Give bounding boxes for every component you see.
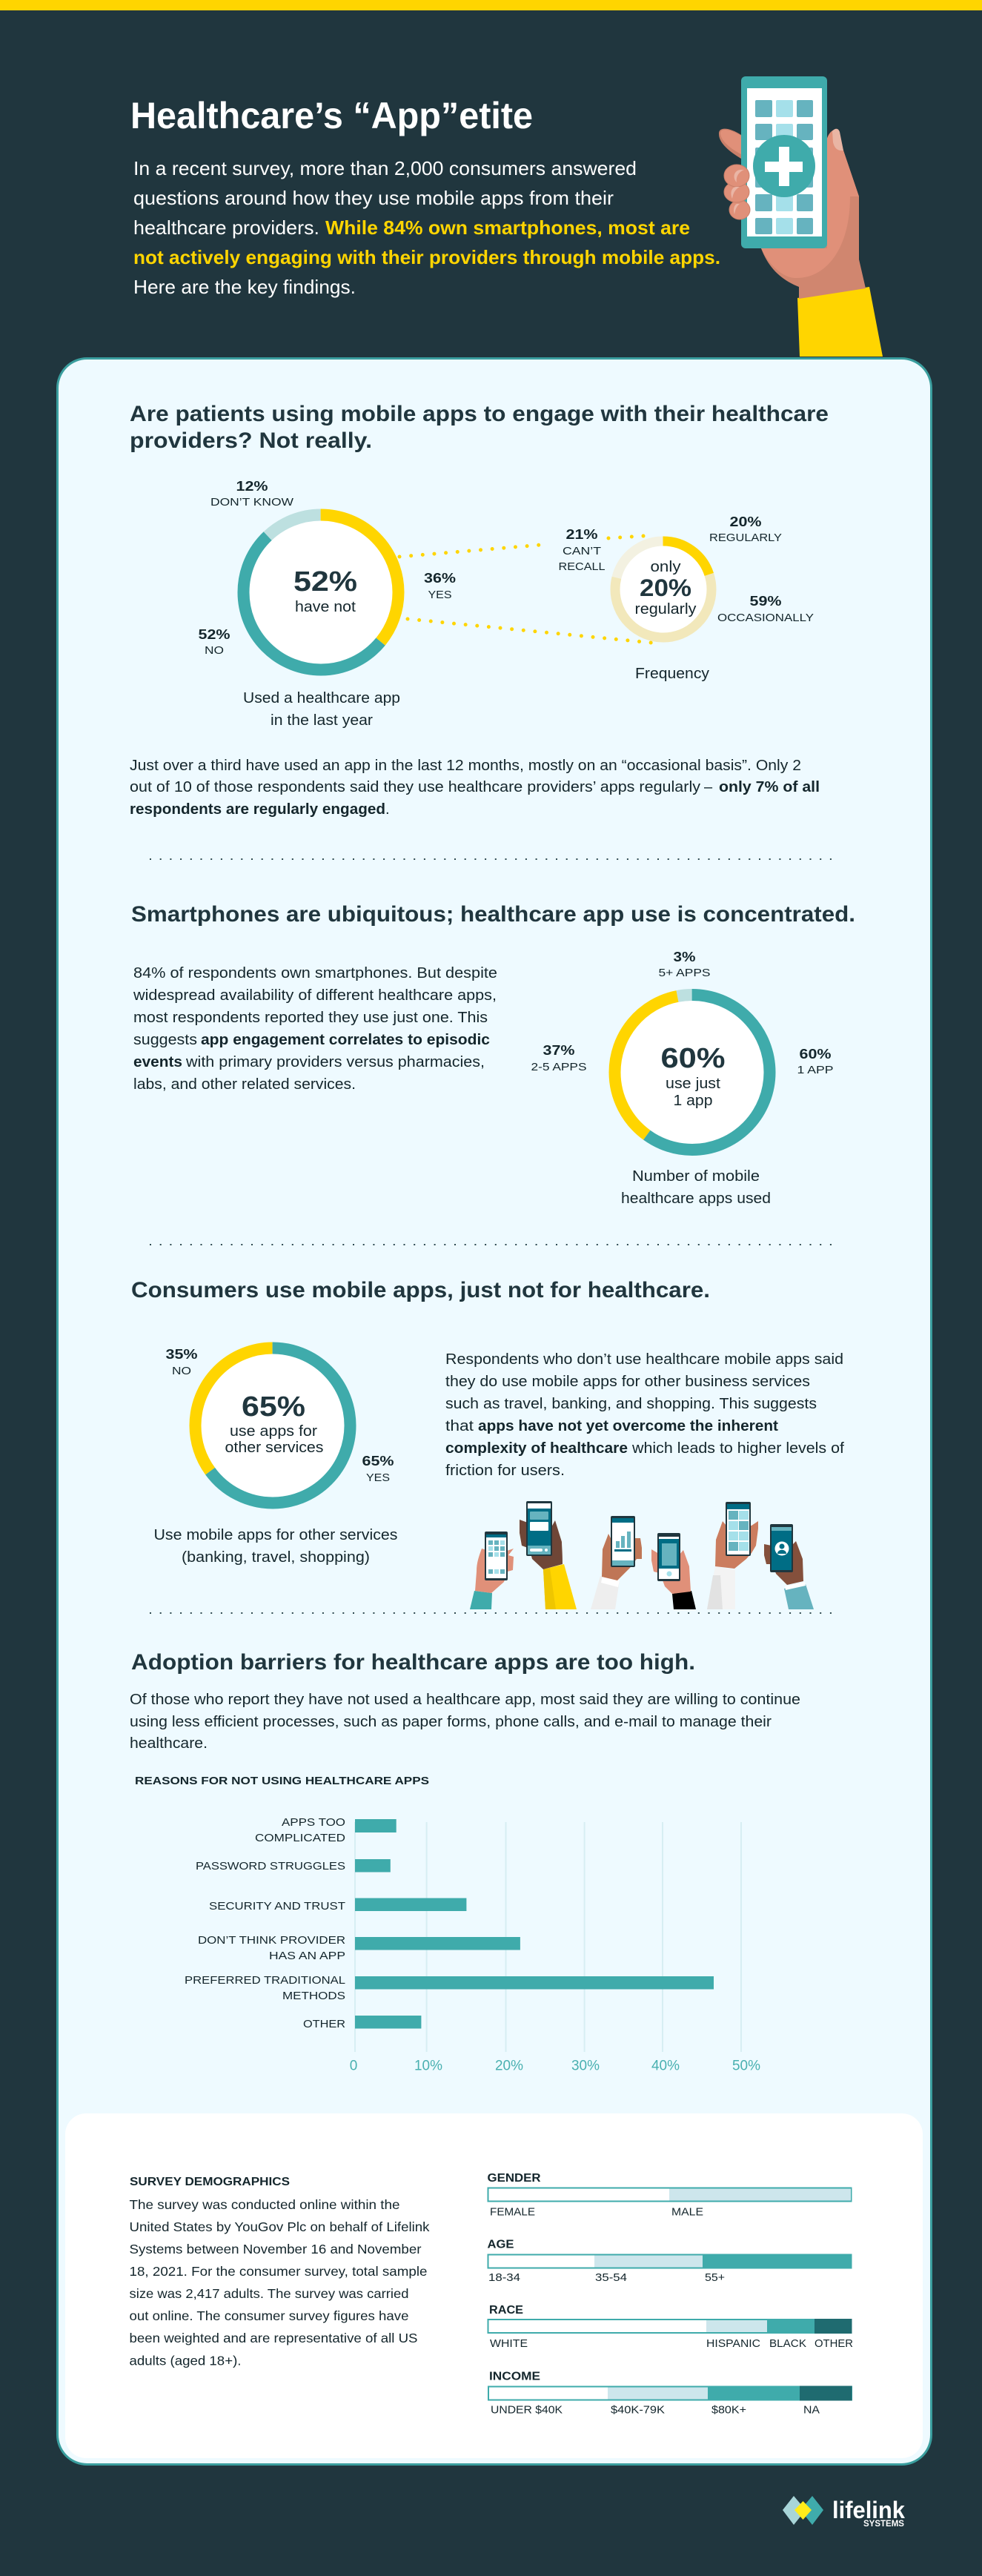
paragraph: section 1: Just over a third have used an app in the last 12 months, mostly on an “occasional basis”. Only 2	[130, 758, 801, 774]
bar: other: OTHER	[303, 2018, 345, 2030]
axis labels: 50%	[732, 2058, 760, 2074]
logo: lifelink systems: SYSTEMS	[863, 2518, 904, 2529]
caption: number of apps: Number of mobile	[632, 1168, 760, 1185]
label: 35% no: NO	[172, 1365, 191, 1377]
chart: gender: FEMALE	[490, 2206, 535, 2218]
donut chart: number of apps used: 1 app	[673, 1093, 713, 1109]
paragraph: section 3: friction for users.	[445, 1463, 565, 1479]
label: 20% regularly	[709, 514, 782, 544]
paragraph: section 2	[133, 965, 497, 1093]
heading: section 1: providers? Not really.	[130, 428, 372, 453]
paragraph: section 3	[445, 1351, 844, 1479]
paragraph: section 1: respondents are regularly engaged	[130, 801, 385, 818]
label: 3% 5+ apps: 5+ APPS	[658, 967, 710, 979]
bar: apps too complicated: COMPLICATED	[255, 1832, 345, 1844]
label: 36% yes: YES	[428, 589, 452, 601]
label: 21% can't recall: CAN’T	[563, 545, 601, 557]
heading: section 1: Are patients using mobile apps to engage with their healthcare	[130, 402, 829, 426]
chart: income	[488, 2371, 852, 2417]
chart: race	[488, 2304, 853, 2350]
caption: other services: Use mobile apps for other services	[154, 1527, 397, 1543]
label: 52% no: NO	[205, 644, 224, 657]
chart: race: BLACK	[769, 2337, 806, 2350]
bar: preferred traditional methods: METHODS	[282, 1990, 345, 2002]
label: 21% can't recall: 21%	[566, 527, 597, 542]
intro text block	[133, 157, 720, 298]
label: 20% regularly: 20%	[729, 514, 762, 529]
hand B	[520, 1501, 577, 1609]
label: 52% no: 52%	[199, 627, 230, 642]
bar: apps too complicated: APPS TOO	[282, 1816, 345, 1829]
paragraph: section 2: labs, and other related services.	[133, 1076, 356, 1093]
caption: other services: (banking, travel, shopping)	[182, 1549, 370, 1566]
chart: race: RACE	[489, 2304, 523, 2317]
chart: race: OTHER	[815, 2337, 853, 2350]
label: 36% yes: 36%	[424, 571, 456, 586]
donut chart: used a healthcare app: 52%	[293, 566, 357, 597]
label: 12% don't know: 12%	[236, 479, 268, 494]
panel: survey demographics	[65, 2113, 923, 2458]
paragraph: section 1: .	[385, 801, 390, 818]
heading: section 1	[130, 402, 829, 453]
donut chart: other services: use apps for	[230, 1423, 317, 1440]
donut chart: other services: other services	[225, 1440, 323, 1456]
paragraph: section 2: 84% of respondents own smartphones. But despite	[133, 965, 497, 981]
hand E	[707, 1502, 758, 1609]
bar: security and trust	[209, 1898, 466, 1913]
chart title: REASONS FOR NOT USING HEALTHCARE APPS	[135, 1775, 429, 1787]
caption: number of apps	[621, 1168, 771, 1207]
paragraph: section 3: which leads to higher levels of	[631, 1440, 844, 1457]
axis labels: 20%	[495, 2058, 523, 2074]
chart: gender: MALE	[671, 2206, 703, 2218]
paragraph: survey demographics: out online. The consumer survey figures have	[129, 2308, 409, 2323]
label: 21% can't recall: RECALL	[559, 560, 605, 573]
caption: used a healthcare app	[243, 690, 400, 729]
donut chart: number of apps used: use just	[666, 1076, 720, 1092]
chart: age: AGE	[488, 2239, 514, 2251]
label: 65% yes: 65%	[362, 1454, 394, 1469]
paragraph: section 3: that	[445, 1418, 474, 1434]
caption: used a healthcare app: Used a healthcare app	[243, 690, 400, 706]
dotted connector lines	[399, 536, 659, 643]
heading: section 3: Consumers use mobile apps, just not for healthcare.	[131, 1278, 710, 1302]
fingers	[724, 165, 750, 219]
bar: password struggles	[196, 1859, 391, 1873]
intro text block: While 84% own smartphones, most are	[325, 216, 690, 239]
label: 35% no	[166, 1347, 197, 1377]
caption: frequency: Frequency	[635, 666, 709, 682]
paragraph: section 1	[130, 758, 820, 818]
medical cross badge	[753, 135, 815, 197]
bar chart: reasons for not using apps	[185, 1816, 760, 2074]
paragraph: section 1: –	[704, 779, 713, 795]
chart: gender: GENDER	[488, 2172, 541, 2185]
donut chart: other services	[196, 1348, 350, 1503]
intro text block: In a recent survey, more than 2,000 consumers answered	[133, 157, 637, 179]
bar: security and trust: SECURITY AND TRUST	[209, 1900, 345, 1913]
label: 60% 1 app: 1 APP	[797, 1064, 833, 1076]
icon: hand holding healthcare phone	[719, 76, 883, 357]
bar: password struggles: PASSWORD STRUGGLES	[196, 1860, 345, 1873]
hand D	[651, 1533, 696, 1609]
paragraph: section 4	[130, 1692, 800, 1752]
chart: age	[488, 2239, 852, 2284]
label: 60% 1 app: 60%	[799, 1047, 832, 1062]
label: 21% can't recall	[559, 527, 605, 573]
chart: age: 35-54	[595, 2271, 627, 2284]
paragraph: section 1: only 7% of all	[719, 779, 820, 795]
axis labels: 40%	[651, 2058, 680, 2074]
hand F	[764, 1524, 814, 1609]
paragraph: survey demographics: adults (aged 18+).	[129, 2353, 242, 2368]
phone body	[741, 76, 827, 248]
donut chart: frequency: only	[651, 559, 680, 575]
heading: section 4: Adoption barriers for healthcare apps are too high.	[131, 1650, 695, 1675]
label: 65% yes: YES	[366, 1471, 390, 1484]
paragraph: section 2: widespread availability of different healthcare apps,	[133, 987, 497, 1004]
logo: lifelink systems	[783, 2496, 905, 2529]
paragraph: section 4: Of those who report they have not used a healthcare app, most said they are willing to continue	[130, 1692, 800, 1708]
caption: used a healthcare app: in the last year	[271, 712, 373, 729]
axis labels: 10%	[414, 2058, 442, 2074]
label: 60% 1 app	[797, 1047, 833, 1076]
paragraph: survey demographics: size was 2,417 adults. The survey was carried	[129, 2286, 409, 2301]
donut chart: frequency: regularly	[634, 601, 697, 617]
axis labels: 0	[350, 2058, 357, 2074]
intro text block: Here are the key findings.	[133, 276, 356, 298]
paragraph: survey demographics: The survey was conducted online within the	[129, 2197, 400, 2212]
donut chart: frequency	[615, 541, 711, 638]
bar: preferred traditional methods	[185, 1974, 714, 2002]
label: 3% 5+ apps: 3%	[673, 950, 695, 964]
bar: don't think provider has an app: HAS AN APP	[269, 1950, 345, 1962]
paragraph: section 4: healthcare.	[130, 1735, 208, 1752]
donut chart: used a healthcare app	[243, 514, 399, 670]
chart: age: 18-34	[488, 2271, 520, 2284]
paragraph: section 2: with primary providers versus pharmacies,	[185, 1054, 485, 1070]
illustration: hands holding phones	[470, 1501, 814, 1609]
caption: other services	[154, 1527, 397, 1566]
donut chart: number of apps used: 60%	[661, 1043, 725, 1074]
label: 37% 2-5 apps: 37%	[543, 1043, 575, 1058]
panel: main card	[58, 359, 931, 2464]
paragraph: survey demographics: been weighted and are representative of all US	[129, 2331, 418, 2345]
intro text block: not actively engaging with their providers through mobile apps.	[133, 246, 720, 268]
donut chart: frequency: 20%	[640, 575, 691, 601]
bar: don't think provider has an app	[198, 1934, 520, 1962]
logo: lifelink systems: lifelink	[832, 2497, 905, 2523]
bar: don't think provider has an app: DON’T THINK PROVIDER	[198, 1934, 345, 1947]
hand	[719, 129, 866, 299]
donut chart: other services: 65%	[242, 1391, 305, 1423]
paragraph: section 3: they do use mobile apps for other business services	[445, 1374, 810, 1390]
paragraph: section 2: app engagement correlates to episodic	[201, 1032, 490, 1048]
paragraph: survey demographics	[129, 2197, 430, 2368]
label: 37% 2-5 apps: 2-5 APPS	[531, 1061, 587, 1073]
paragraph: section 3: complexity of healthcare	[445, 1440, 628, 1457]
hand C	[591, 1516, 642, 1609]
sleeve	[797, 287, 883, 357]
label: 65% yes	[362, 1454, 394, 1484]
title: Healthcare’s “App”etite	[130, 95, 533, 136]
donut chart: used a healthcare app: have not	[295, 599, 356, 615]
label: 59% occasionally: OCCASIONALLY	[717, 612, 814, 624]
label: 20% regularly: REGULARLY	[709, 532, 782, 544]
paragraph: section 2: most respondents reported they use just one. This	[133, 1010, 488, 1026]
bar: preferred traditional methods: PREFERRED TRADITIONAL	[185, 1974, 345, 1987]
chart: age: 55+	[705, 2271, 725, 2284]
intro text block: healthcare providers.	[133, 216, 319, 239]
label: 35% no: 35%	[166, 1347, 197, 1362]
bar: other	[303, 2016, 421, 2030]
hand A	[470, 1532, 514, 1609]
paragraph: survey demographics: United States by YouGov Plc on behalf of Lifelink	[129, 2219, 430, 2234]
chart: income: $40K-79K	[611, 2403, 665, 2417]
chart: income: INCOME	[489, 2371, 540, 2383]
paragraph: section 3: apps have not yet overcome the inherent	[478, 1418, 778, 1434]
chart: race: HISPANIC	[706, 2337, 760, 2350]
chart: gender	[488, 2172, 851, 2218]
axis labels	[350, 2058, 760, 2074]
label: 59% occasionally	[717, 594, 814, 624]
paragraph: section 3: such as travel, banking, and shopping. This suggests	[445, 1396, 817, 1412]
bar: apps too complicated	[255, 1816, 397, 1844]
paragraph: section 2: events	[133, 1054, 182, 1070]
chart: race: WHITE	[490, 2337, 528, 2350]
donut chart: number of apps used	[615, 995, 769, 1150]
caption: number of apps: healthcare apps used	[621, 1191, 771, 1207]
paragraph: survey demographics: Systems between November 16 and November	[129, 2242, 422, 2257]
label: 59% occasionally: 59%	[750, 594, 781, 609]
chart: income: $80K+	[711, 2403, 746, 2417]
axis labels: 30%	[571, 2058, 600, 2074]
paragraph: section 3: Respondents who don’t use healthcare mobile apps said	[445, 1351, 843, 1368]
paragraph: survey demographics: 18, 2021. For the consumer survey, total sample	[129, 2264, 427, 2279]
label: 36% yes	[424, 571, 456, 601]
heading: section 2: Smartphones are ubiquitous; healthcare app use is concentrated.	[131, 902, 855, 927]
paragraph: section 1: out of 10 of those respondents said they use healthcare providers’ apps regularly	[130, 779, 700, 795]
chart: income: NA	[803, 2403, 820, 2417]
label: 12% don't know: DON’T KNOW	[210, 496, 294, 509]
label: 52% no	[199, 627, 230, 657]
intro text block: questions around how they use mobile apps from their	[133, 187, 614, 209]
paragraph: section 2: suggests	[133, 1032, 197, 1048]
label: 3% 5+ apps	[658, 950, 710, 979]
label: 37% 2-5 apps	[531, 1043, 587, 1073]
paragraph: section 4: using less efficient processes, such as paper forms, phone calls, and e-mail to manage their	[130, 1714, 772, 1730]
chart: income: UNDER $40K	[491, 2403, 563, 2417]
label: 12% don't know	[210, 479, 294, 509]
heading: survey demographics: SURVEY DEMOGRAPHICS	[130, 2176, 290, 2188]
